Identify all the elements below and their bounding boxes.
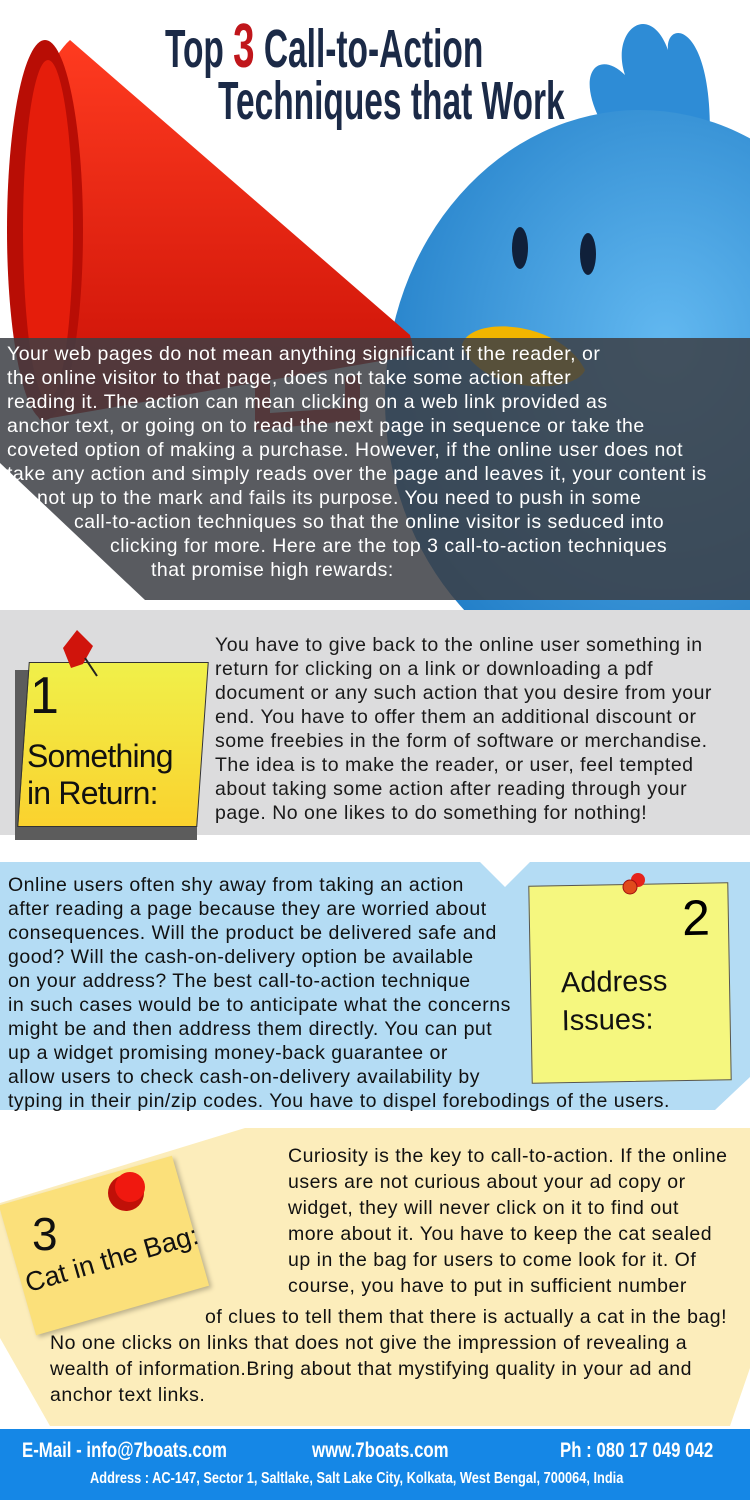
panel: 1 something in return: You have to give back to the online user something in	[215, 634, 703, 656]
icon: red pin	[108, 1172, 145, 1211]
panel: 3 cat in the bag: users are not curious about your ad copy or	[288, 1171, 686, 1193]
bird	[385, 24, 750, 690]
intro panel: take any action and simply reads over the page and leaves it, your content is	[7, 463, 707, 485]
panel: 3 cat in the bag: Curiosity is the key to call-to-action. If the online	[288, 1145, 727, 1167]
intro panel	[0, 338, 750, 600]
sticky note 2	[528, 882, 732, 1084]
intro panel: reading it. The action can mean clicking on a web link provided as	[7, 391, 608, 413]
panel: 3 cat in the bag: No one clicks on links that does not give the impression of revealing a	[50, 1332, 687, 1354]
illustration: megaphone and bird	[7, 24, 750, 610]
panel: 2 address issues: in such cases would be to anticipate what the concerns	[8, 994, 511, 1016]
panel: 1 something in return: some freebies in the form of software or merchandise.	[215, 730, 708, 752]
panel: 1 something in return: The idea is to make the reader, or user, feel tempted	[215, 754, 694, 776]
panel: 2 address issues: on your address? The best call-to-action technique	[8, 970, 471, 992]
intro panel: clicking for more. Here are the top 3 call-to-action techniques	[110, 535, 667, 557]
note 3 label: Cat in the Bag:	[22, 1220, 202, 1298]
intro panel: that promise high rewards:	[151, 559, 394, 581]
icon: pin	[622, 873, 645, 894]
panel: 2 address issues: might be and then address them directly. You can put	[8, 1018, 492, 1040]
megaphone	[7, 40, 415, 430]
panel: 3 cat in the bag: anchor text links.	[50, 1384, 205, 1406]
title: Techniques that Work	[218, 71, 565, 131]
panel: 2 address issues	[0, 862, 750, 1112]
intro panel: coveted option of making a purchase. However, if the online user does not	[7, 439, 683, 461]
title	[165, 12, 565, 131]
panel: 1 something in return: return for clicking on a link or downloading a pdf	[215, 658, 653, 680]
panel: 2 address issues: allow users to check cash-on-delivery availability by	[8, 1066, 480, 1088]
panel: 3 cat in the bag: of clues to tell them that there is actually a cat in the bag!	[205, 1306, 727, 1328]
panel: 3 cat in the bag: widget, they will never click on it to find out	[288, 1197, 679, 1219]
icon: red pin	[63, 630, 98, 676]
sticky note 3	[0, 1156, 209, 1335]
sticky note 2: 2	[682, 890, 710, 946]
panel: 3 cat in the bag: wealth of information.Bring about that mystifying quality in your ad and	[50, 1358, 692, 1380]
panel: 1 something in return: about taking some action after reading through your	[215, 778, 687, 800]
sticky note 1: Something	[27, 738, 173, 774]
footer: website: www.7boats.com	[312, 1439, 449, 1462]
panel: 1 something in return: end. You have to offer them an additional discount or	[215, 706, 696, 728]
title: Top 3 Call-to-Action	[165, 12, 483, 81]
intro panel: call-to-action techniques so that the online visitor is seduced into	[74, 511, 664, 533]
panel: 3 cat in the bag	[0, 1128, 750, 1426]
panel: 1 something in return: document or any such action that you desire from your	[215, 682, 712, 704]
intro panel: Your web pages do not mean anything significant if the reader, or	[7, 343, 600, 365]
panel: 1 something in return	[0, 610, 750, 835]
panel: 3 cat in the bag: up in the bag for users to come look for it. Of	[288, 1249, 696, 1271]
footer: phone: Ph : 080 17 049 042	[560, 1439, 713, 1462]
note 3 number: 3	[32, 1208, 58, 1260]
intro panel: the online visitor to that page, does not take some action after	[7, 367, 571, 389]
sticky note 2: Issues:	[561, 1004, 654, 1037]
panel: 1 something in return: page. No one likes to do something for nothing!	[215, 802, 647, 824]
sticky note 1	[15, 630, 209, 840]
intro panel: anchor text, or going on to read the next page in sequence or take the	[7, 415, 645, 437]
sticky note 1: in Return:	[27, 775, 158, 811]
footer: address: Address : AC-147, Sector 1, Saltlake, Salt Lake City, Kolkata, West Bengal, 700064, India	[90, 1470, 623, 1487]
footer	[0, 1429, 750, 1500]
sticky note 1: 1	[30, 667, 59, 725]
intro panel: not up to the mark and fails its purpose. You need to push in some	[37, 487, 641, 509]
panel: 3 cat in the bag: course, you have to put in sufficient number	[288, 1275, 687, 1297]
footer: email: E-Mail - info@7boats.com	[22, 1439, 227, 1462]
panel: 2 address issues: Online users often shy away from taking an action	[8, 874, 464, 896]
sticky note 2: Address	[561, 965, 668, 999]
panel: 2 address issues: after reading a page because they are worried about	[8, 898, 487, 920]
panel: 2 address issues: typing in their pin/zip codes. You have to dispel forebodings of the users.	[8, 1090, 670, 1112]
panel: 2 address issues: consequences. Will the product be delivered safe and	[8, 922, 497, 944]
panel: 3 cat in the bag: more about it. You have to keep the cat sealed	[288, 1223, 712, 1245]
panel: 2 address issues: good? Will the cash-on-delivery option be available	[8, 946, 474, 968]
panel: 2 address issues: up a widget promising money-back guarantee or	[8, 1042, 448, 1064]
